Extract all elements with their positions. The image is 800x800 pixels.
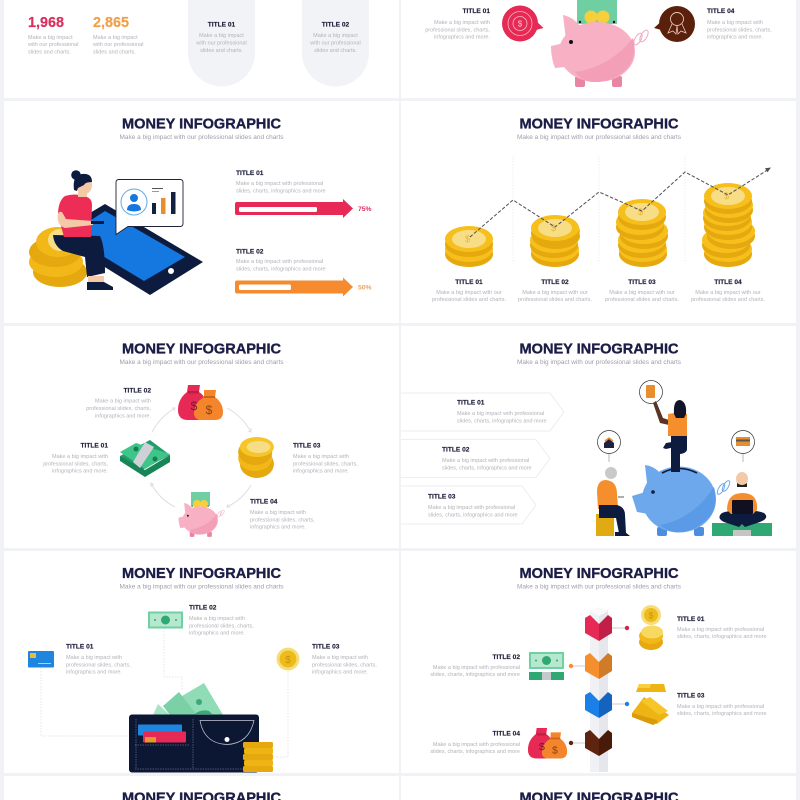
tab: title 02: TITLE 02 — [442, 446, 470, 454]
text: title 02: Make a big impact with our — [522, 290, 588, 296]
icon: coin and coin stack: $ — [648, 610, 654, 620]
subheading: Make a big impact with our professional slides and charts — [120, 359, 284, 366]
stat: 2,865: with our professional — [92, 42, 143, 48]
text: title 03: Make a big impact with — [312, 655, 368, 661]
stat: 1,968: slides and charts. — [28, 50, 71, 56]
heading: MONEY INFOGRAPHIC — [122, 342, 281, 358]
block: brown — [569, 730, 612, 756]
heading: MONEY INFOGRAPHIC — [122, 566, 281, 582]
text: title 02 — [430, 654, 520, 678]
text: title 03: slides, charts, infographics and more — [677, 711, 767, 717]
text: title 02: Make a big impact with professional — [433, 665, 520, 671]
tab: title 01 — [401, 393, 564, 431]
tab: title 03: slides, charts, infographics and more — [428, 512, 518, 518]
pill: title 01: with our professional — [195, 40, 247, 46]
heading: MONEY INFOGRAPHIC — [520, 117, 679, 133]
stat: 1,968: with our professional — [27, 42, 78, 48]
text: title 02: Make a big impact with — [95, 399, 151, 405]
heading: MONEY INFOGRAPHIC — [520, 566, 679, 582]
panel: row 1 left stats and pills — [4, 0, 399, 98]
tab: title 02: Make a big impact with professional — [442, 458, 529, 464]
icon: coin stack — [238, 437, 274, 478]
text: title 04: Make a big impact with our — [695, 290, 761, 296]
text: title 03: Make a big impact with professional — [677, 704, 764, 710]
text: title 01: Make a big impact with — [66, 655, 122, 661]
panel: people with piggy bank — [401, 326, 796, 548]
subheading: Make a big impact with our professional slides and charts — [120, 584, 284, 590]
text: title 03: Make a big impact with — [293, 454, 349, 460]
arrows: cycle — [151, 408, 251, 507]
text: title 04: TITLE 04 — [250, 498, 278, 506]
text: title 04: TITLE 04 — [493, 730, 520, 738]
column — [590, 607, 608, 772]
text: title 01: TITLE 01 — [463, 8, 490, 15]
pill: title 02: Make a big impact — [313, 33, 358, 39]
icon: money bags — [178, 385, 223, 420]
connectors — [571, 628, 627, 743]
stat: 1,968: Make a big impact — [28, 35, 73, 41]
text: title 03: TITLE 03 — [312, 644, 340, 650]
text: title 01: TITLE 01 — [236, 170, 264, 177]
panel: coin growth chart — [401, 101, 796, 323]
icon: banknote — [148, 612, 183, 628]
icon: gold coin: $ — [285, 655, 291, 666]
text: title 01: slides, charts, infographics and more — [677, 634, 767, 640]
text: title 03 — [677, 692, 767, 717]
text: title 01: professional slides and charts. — [432, 297, 506, 303]
text: title 01 — [432, 279, 506, 303]
text: title 02: slides, charts, infographics and more — [430, 672, 520, 678]
subheading: Make a big impact with our professional slides and charts — [120, 134, 284, 141]
text: title 03 — [312, 644, 377, 676]
text: title 04 — [707, 8, 772, 41]
text: title 04: TITLE 04 — [707, 8, 735, 15]
pill: title 01 — [188, 0, 255, 86]
icon: money bags — [528, 728, 567, 758]
text: title 04: professional slides, charts, — [707, 27, 772, 33]
text: title 01: infographics and more. — [434, 35, 490, 41]
icon: coin stack — [243, 742, 273, 772]
panel: money cycle — [4, 326, 399, 548]
text: title 02: slides, charts, infographics and more — [236, 266, 326, 272]
illustration: standing woman — [640, 380, 687, 472]
text: title 01: professional slides, charts, — [66, 662, 131, 668]
text: title 01: TITLE 01 — [66, 644, 94, 650]
text: title 01: professional slides, charts, — [425, 27, 490, 33]
icon: piggy bank with money — [178, 492, 225, 537]
text: title 03: infographics and more. — [293, 469, 349, 475]
tab: title 03: Make a big impact with professional — [428, 505, 515, 511]
subheading: Make a big impact with our professional slides and charts — [517, 359, 681, 366]
text: title 01: TITLE 01 — [81, 442, 108, 450]
pill: title 01: TITLE 01 — [208, 22, 236, 28]
pill: title 02: slides and charts. — [314, 48, 357, 54]
icon: coin pile — [29, 227, 87, 287]
heading: MONEY INFOGRAPHIC — [122, 117, 281, 133]
text: title 02: TITLE 02 — [189, 604, 217, 612]
stat: 1,968 — [27, 15, 78, 56]
text: title 03: professional slides, charts, — [312, 662, 377, 668]
text: title 02: Make a big impact with professional — [236, 259, 323, 265]
text: title 02: TITLE 02 — [493, 654, 520, 661]
text: title 02 — [236, 248, 326, 272]
text: title 01 — [677, 616, 767, 640]
text: title 04: infographics and more. — [707, 35, 763, 41]
text: title 03: professional slides and charts. — [605, 297, 679, 303]
pill: title 02: with our professional — [309, 40, 361, 46]
text: title 02: infographics and more. — [189, 631, 245, 637]
icon: tablet — [53, 204, 203, 295]
text: title 01 — [425, 8, 490, 41]
text: title 01 — [236, 170, 326, 194]
stat: 2,865 — [92, 15, 143, 56]
text: title 02 — [518, 279, 592, 303]
icon: wallet — [129, 714, 259, 772]
tab: title 03 — [401, 486, 536, 524]
panel: bottom left cropped — [4, 776, 399, 800]
coin stack 2 — [530, 215, 580, 267]
text: title 02: TITLE 02 — [124, 388, 151, 394]
tab: title 03: TITLE 03 — [428, 494, 456, 500]
text: title 01: infographics and more. — [66, 670, 122, 676]
text: title 02: Make a big impact with — [189, 616, 245, 622]
text: title 03: infographics and more. — [312, 670, 368, 676]
text: title 02 — [189, 604, 254, 637]
text: title 01: infographics and more. — [52, 469, 108, 475]
illustration: man with laptop — [712, 430, 772, 536]
text: title 02: infographics and more. — [95, 413, 151, 419]
arrow: 75% — [235, 199, 372, 218]
tab: title 01: TITLE 01 — [457, 400, 485, 406]
block: blue — [585, 692, 629, 718]
panel: wallet — [4, 551, 399, 773]
tab: title 02: slides, charts, infographics and more — [442, 465, 532, 471]
stat: 2,865: slides and charts. — [93, 50, 136, 56]
stat: 2,865: 2,865 — [93, 15, 129, 31]
icon: gold bars — [632, 684, 669, 725]
text: title 01 — [66, 644, 131, 676]
text: title 03: TITLE 03 — [628, 279, 656, 286]
text: title 04 — [250, 498, 315, 531]
icon: blue piggy bank — [632, 465, 731, 536]
text: title 04: infographics and more. — [250, 525, 306, 531]
icon: cash stack — [120, 440, 170, 477]
icon: coin and coin stack — [639, 605, 663, 650]
text: title 03 — [605, 279, 679, 303]
text: title 04: Make a big impact with — [707, 20, 763, 26]
text: title 02 — [86, 388, 151, 419]
illustration: woman sitting — [53, 170, 113, 290]
panel: row 1 right piggy bank — [401, 0, 796, 98]
illustration: sitting man — [596, 430, 630, 536]
icon: red target bubble — [502, 6, 544, 42]
block: orange — [569, 653, 612, 679]
text: title 04: TITLE 04 — [714, 279, 742, 286]
coin stack 3 — [616, 199, 668, 267]
text: title 01: slides, charts, infographics and more — [236, 188, 326, 194]
subheading: Make a big impact with our professional slides and charts — [517, 584, 681, 590]
coin stack 1 — [445, 226, 493, 267]
icon: money in slot — [577, 0, 617, 24]
arrow: 50%: 50% — [358, 284, 372, 292]
tab: title 01: Make a big impact with professional — [457, 411, 544, 417]
text: title 03: TITLE 03 — [677, 692, 705, 700]
callout: chart card — [116, 180, 183, 234]
text: title 03 — [293, 442, 358, 475]
text: title 03: Make a big impact with our — [609, 290, 675, 296]
text: title 02: professional slides and charts. — [518, 297, 592, 303]
text: title 01: professional slides, charts, — [43, 461, 108, 467]
text: title 04: slides, charts, infographics and more — [430, 749, 520, 755]
icon: brown badge bubble — [654, 6, 695, 42]
block: red — [585, 615, 629, 641]
icon: red target bubble: $ — [518, 20, 523, 28]
text: title 02: professional slides, charts, — [86, 406, 151, 412]
arrow: 50% — [235, 278, 372, 296]
text: title 03: TITLE 03 — [293, 442, 321, 450]
icon: credit card — [28, 651, 54, 668]
text: title 01: TITLE 01 — [677, 616, 705, 623]
stat: 2,865: Make a big impact — [93, 35, 138, 41]
pill: title 02 — [302, 0, 369, 86]
text: title 01: Make a big impact with — [52, 454, 108, 460]
text: title 04 — [430, 730, 520, 755]
icon: banknote and band — [529, 652, 564, 680]
panel: phone and progress arrows — [4, 101, 399, 323]
text: title 01: Make a big impact with — [434, 20, 490, 26]
icon: banknotes in wallet — [153, 683, 223, 715]
text: title 04: professional slides, charts, — [250, 517, 315, 523]
subheading: Make a big impact with our professional slides and charts — [517, 134, 681, 141]
text: title 01: Make a big impact with our — [436, 290, 502, 296]
panel: bottom right cropped — [401, 776, 796, 800]
text: title 04 — [691, 279, 765, 303]
pill: title 02: TITLE 02 — [322, 22, 350, 28]
text: title 02: TITLE 02 — [236, 248, 264, 256]
text: title 04: Make a big impact with professional — [433, 742, 520, 748]
coin stack 4 — [702, 183, 755, 267]
stat: 1,968: 1,968 — [28, 15, 64, 31]
text: title 01: Make a big impact with professional — [677, 627, 764, 633]
connectors — [41, 628, 288, 757]
text: title 01: Make a big impact with professional — [236, 181, 323, 187]
arrow: 75%: 75% — [358, 206, 372, 213]
pill: title 01: Make a big impact — [199, 33, 244, 39]
text: title 04: Make a big impact with — [250, 510, 306, 516]
text: title 02: TITLE 02 — [541, 279, 569, 286]
tab: title 02 — [401, 440, 550, 478]
tab: title 01: slides, charts, infographics and more — [457, 418, 547, 424]
arrow: dashed trend line — [470, 168, 771, 237]
text: title 04: professional slides and charts. — [691, 297, 765, 303]
pill: title 01: slides and charts. — [200, 48, 243, 54]
text: title 01 — [43, 442, 108, 475]
column dividers — [513, 155, 685, 262]
icon: pink piggy bank — [551, 15, 650, 87]
icon: gold coin — [276, 648, 300, 670]
text: title 01: TITLE 01 — [455, 279, 483, 286]
panel: vertical timeline — [401, 551, 796, 773]
text: title 03: professional slides, charts, — [293, 461, 358, 467]
heading: MONEY INFOGRAPHIC — [520, 342, 679, 358]
text: title 02: professional slides, charts, — [189, 623, 254, 629]
